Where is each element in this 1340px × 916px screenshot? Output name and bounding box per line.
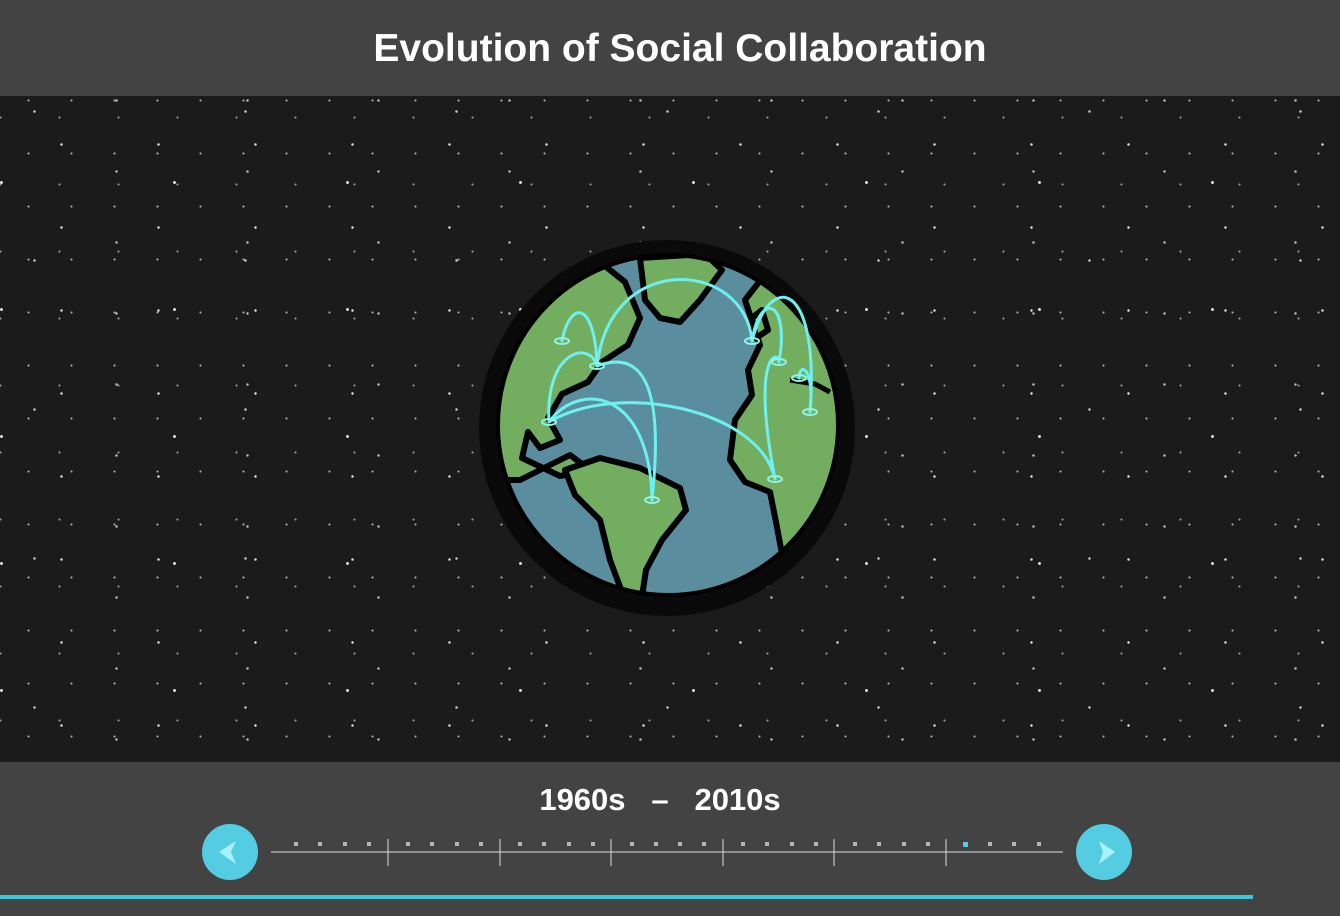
year range label: 1960s – 2010s xyxy=(539,782,781,817)
starfield panel xyxy=(0,96,1340,762)
prev button xyxy=(202,824,258,880)
connection arcs xyxy=(549,280,811,500)
node markers xyxy=(542,338,817,503)
next button xyxy=(1076,824,1132,880)
bottom controls panel xyxy=(0,762,1340,916)
progress bar xyxy=(0,895,1253,899)
timeline slider xyxy=(0,824,1253,899)
globe with connection arcs xyxy=(479,240,855,616)
header bar xyxy=(0,0,1340,96)
title: Evolution of Social Collaboration xyxy=(373,27,987,70)
